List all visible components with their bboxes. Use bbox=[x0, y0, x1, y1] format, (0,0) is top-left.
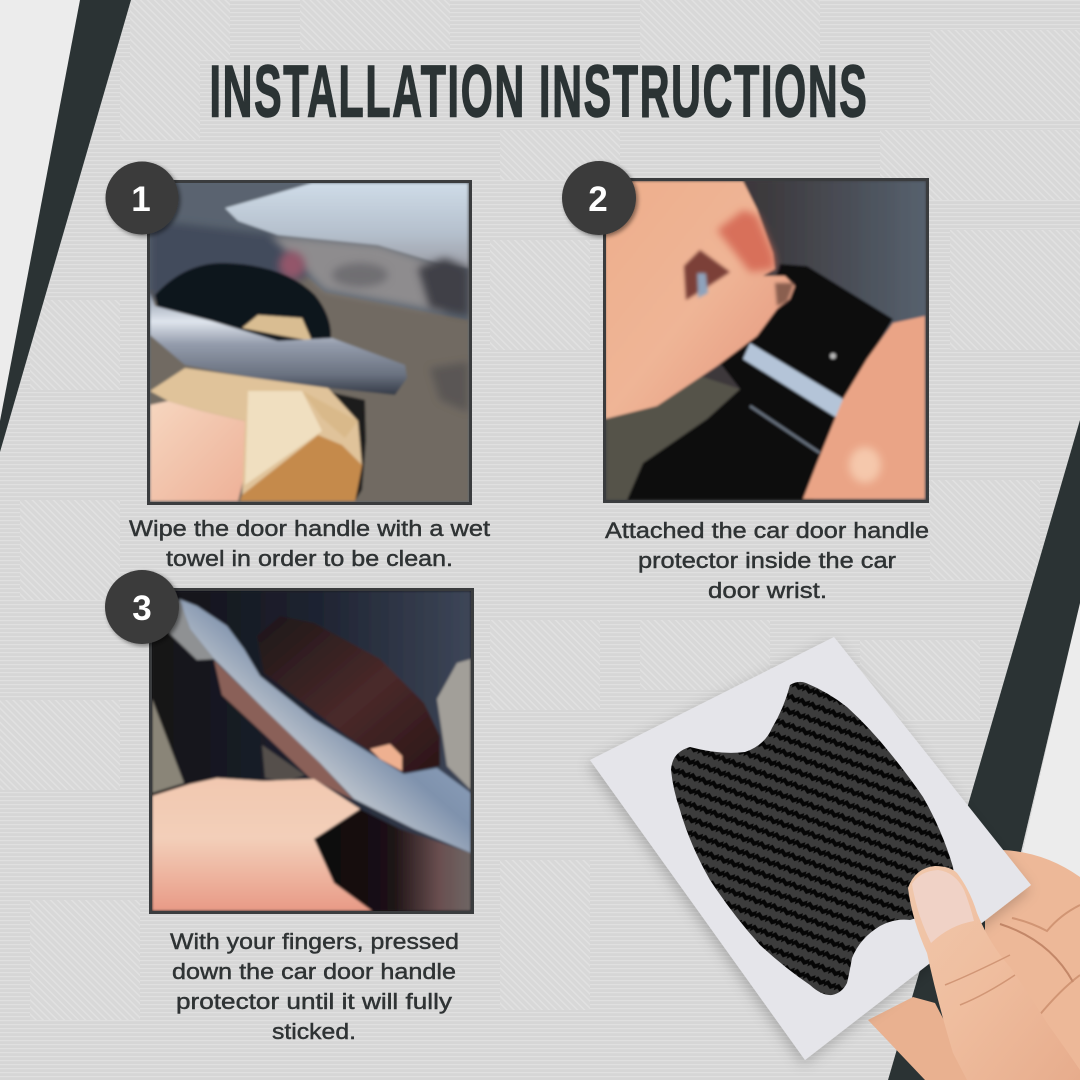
hand: fingers bbox=[985, 850, 1080, 1080]
caption: step 2: door wrist. bbox=[708, 578, 827, 603]
light corner: top left bbox=[0, 0, 80, 421]
caption: step 1 bbox=[129, 516, 490, 571]
number badge 1: 1 bbox=[131, 180, 151, 219]
caption: step 3: protector until it will fully bbox=[176, 989, 452, 1014]
carbon sticker bbox=[671, 682, 958, 995]
photo: attaching protector bbox=[604, 180, 928, 502]
caption: step 1: towel in order to be clean. bbox=[166, 546, 453, 571]
caption: step 2: Attached the car door handle bbox=[605, 518, 929, 543]
dark diagonal band: right bbox=[888, 420, 1080, 1080]
thumb nail bbox=[912, 870, 974, 943]
hand: thumb bbox=[908, 866, 1080, 1080]
caption: step 3: down the car door handle bbox=[172, 959, 456, 984]
caption: step 1: Wipe the door handle with a wet bbox=[129, 516, 490, 541]
caption: step 3 bbox=[170, 929, 459, 1044]
number badge 3 bbox=[105, 570, 179, 644]
number badge 2: 2 bbox=[588, 180, 608, 219]
number badge 1 bbox=[106, 162, 178, 234]
dark diagonal band: top left bbox=[0, 0, 131, 452]
panel: step 3 bbox=[105, 570, 472, 1044]
caption: step 2 bbox=[605, 518, 929, 603]
hand: palm behind card bbox=[868, 997, 975, 1080]
thumb knuckle creases bbox=[945, 955, 1015, 1005]
photo: pressing protector bbox=[150, 590, 472, 912]
light corner: right bbox=[970, 603, 1080, 1080]
panel: step 2 bbox=[562, 161, 929, 603]
caption: step 3: With your fingers, pressed bbox=[170, 929, 459, 954]
number badge 2 bbox=[562, 161, 636, 235]
backing card bbox=[590, 637, 1031, 1060]
caption: step 3: sticked. bbox=[272, 1019, 356, 1044]
number badge 3: 3 bbox=[132, 589, 152, 628]
product: hand holding carbon fibre sticker bbox=[590, 637, 1080, 1080]
photo: wiping door handle bbox=[148, 182, 470, 504]
caption: step 2: protector inside the car bbox=[638, 548, 896, 573]
panel: step 1 bbox=[106, 162, 490, 571]
